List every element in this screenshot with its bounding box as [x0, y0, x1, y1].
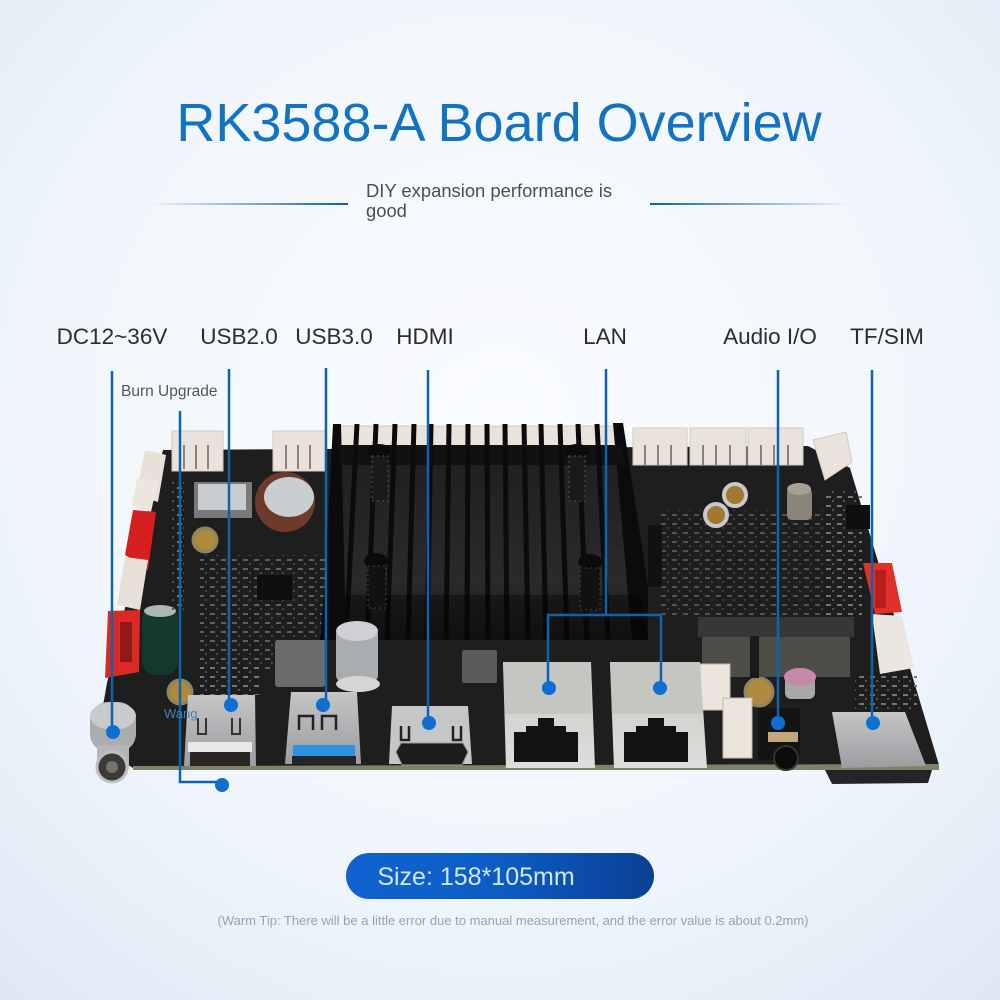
subtitle rule right [650, 203, 850, 205]
minipcie slot [698, 617, 854, 678]
standoff [787, 483, 812, 520]
left connectors [105, 450, 166, 678]
silver capacitor [336, 621, 380, 692]
ic [257, 575, 292, 600]
hdmi port [389, 706, 472, 765]
heatsink fin ridges [346, 424, 608, 640]
port labels: HDMI [396, 324, 454, 349]
title: RK3588-A Board Overview [176, 93, 823, 153]
heatsink springs [364, 444, 602, 610]
callout dots [106, 681, 880, 792]
usb 2.0 [184, 695, 256, 766]
port labels: LAN [583, 324, 627, 349]
callout lines [112, 368, 872, 782]
usb 3.0 [285, 692, 361, 764]
faint wang label: Wang [164, 706, 197, 721]
fpc connector [648, 525, 662, 587]
burn upgrade label: Burn Upgrade [121, 383, 218, 400]
heatsink lower shadow [345, 595, 648, 640]
subtitle: DIY expansion performance is [366, 180, 612, 201]
mounting holes [168, 528, 773, 706]
size pill: Size: 158*105mm [377, 863, 575, 891]
port labels: USB2.0 [200, 324, 278, 349]
wifi module [194, 482, 252, 518]
subtitle rule left [150, 203, 348, 205]
dc jack [90, 702, 136, 782]
pcb [96, 446, 939, 768]
lan ports [503, 662, 707, 768]
port labels: USB3.0 [295, 324, 373, 349]
capacitor green [142, 605, 178, 675]
subtitle: good [366, 200, 407, 221]
connector pins [184, 445, 788, 469]
pcb detail [200, 555, 325, 670]
heatsink [320, 423, 648, 640]
coin battery [255, 472, 315, 532]
port labels [57, 324, 924, 349]
port labels: Audio I/O [723, 324, 817, 349]
warm tip: (Warm Tip: There will be a little error due to manual measurement, and the error value is about 0.2mm) [217, 913, 809, 928]
port labels: TF/SIM [850, 324, 924, 349]
subtitle [366, 180, 612, 221]
board [90, 423, 939, 784]
right connectors [846, 505, 914, 674]
size pill [346, 853, 654, 899]
port labels: DC12~36V [57, 324, 167, 349]
white connectors, back edge [172, 426, 852, 480]
purple capacitor [784, 668, 816, 699]
tf sim slot [825, 712, 932, 784]
audio jack [758, 708, 800, 770]
white connector by audio [698, 664, 752, 758]
inductors [275, 640, 497, 687]
